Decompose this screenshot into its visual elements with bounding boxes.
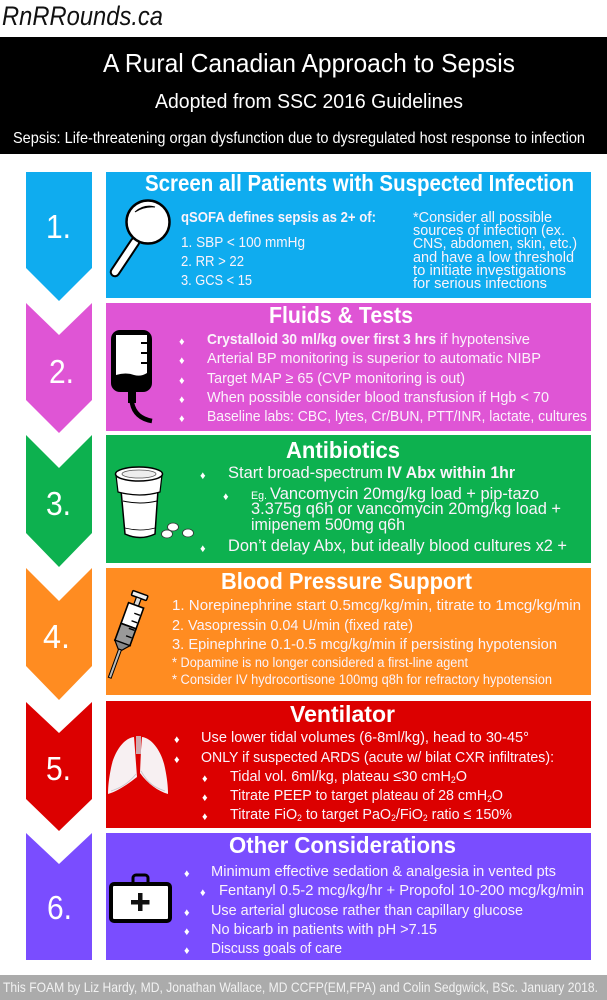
list: ventilator: /FiO [396, 806, 423, 823]
list: ventilator: Tidal vol. 6ml/kg, plateau ≤30 cmH [230, 768, 459, 785]
list: ventilator: ONLY if suspected ARDS (acute w/ bilat CXR infiltrates): [201, 749, 554, 766]
step arrow 6: 6. [47, 889, 72, 926]
list: other considerations [184, 863, 584, 957]
step arrow 3 [26, 435, 92, 567]
list: vasopressors: 1. Norepinephrine start 0.5mcg/kg/min, titrate to 1mcg/kg/min [172, 597, 581, 614]
note: sources of infection: *Consider all possible [413, 209, 552, 226]
list: antibiotics: Don’t delay Abx, but ideally blood cultures x2 + [228, 537, 567, 555]
list: vasopressors: * Consider IV hydrocortisone 100mg q8h for refractory hypotension [172, 672, 552, 687]
list: fluids and tests: Baseline labs: CBC, lytes, Cr/BUN, PTT/INR, lactate, cultures [207, 408, 587, 425]
list: fluids and tests: if hypotensive [440, 331, 530, 348]
list: antibiotics: 3.375g q6h or vancomycin 20mg/kg load + [251, 500, 561, 518]
note: sources of infection [413, 209, 577, 292]
list: other considerations: Minimum effective sedation & analgesia in vented pts [211, 863, 556, 880]
list: vasopressors: 3. Epinephrine 0.1-0.5 mcg/kg/min if persisting hypotension [172, 636, 557, 653]
step arrow 6 [26, 833, 92, 960]
list: other considerations: ♦ [184, 868, 190, 880]
list: vasopressors: * Dopamine is no longer considered a first-line agent [172, 655, 468, 670]
list: ventilator: Titrate FiO [230, 806, 300, 823]
list: ventilator: O [492, 787, 503, 804]
list: ventilator: O [456, 768, 467, 785]
list: antibiotics: Vancomycin 20mg/kg load + pip-tazo [270, 485, 539, 503]
list: fluids and tests: Crystalloid 30 ml/kg over first 3 hrs [207, 331, 436, 348]
icon: magnifying glass [115, 200, 170, 272]
qSOFA criteria: 1. SBP < 100 mmHg [181, 234, 305, 251]
list: fluids and tests: ♦ [179, 336, 185, 348]
list: other considerations: No bicarb in patients with pH >7.15 [211, 921, 437, 938]
icon: pill bottle [116, 467, 194, 538]
step arrow 1: 1. [46, 208, 71, 245]
list: other considerations: Use arterial glucose rather than capillary glucose [211, 902, 523, 919]
list: antibiotics: ♦ [223, 491, 229, 503]
step arrow 2: 2. [49, 353, 74, 390]
heading: fluids: Fluids & Tests [269, 302, 413, 328]
list: antibiotics: imipenem 500mg q6h [251, 516, 405, 534]
list: other considerations: ♦ [200, 887, 206, 899]
note: sources of infection: to initiate investigations [413, 262, 566, 279]
list: fluids and tests [179, 331, 587, 425]
icon: first aid kit [111, 875, 170, 921]
note: sources of infection: CNS, abdomen, skin, etc.) [413, 235, 577, 252]
step arrow 5 [26, 702, 92, 831]
heading: antibiotics: Antibiotics [286, 437, 400, 463]
list: ventilator: ♦ [202, 811, 208, 823]
list: ventilator: ratio ≤ 150% [428, 806, 512, 823]
list: antibiotics [200, 464, 567, 555]
list: antibiotics: Start broad-spectrum [228, 464, 383, 482]
icon: IV bag [111, 330, 152, 421]
list: antibiotics: Eg. [251, 490, 267, 502]
panel: other considerations [106, 832, 591, 960]
list: ventilator: 2 [391, 813, 396, 823]
list: fluids and tests: When possible consider blood transfusion if Hgb < 70 [207, 389, 549, 406]
list: ventilator: to target PaO [302, 806, 391, 823]
list: ventilator: 2 [423, 813, 428, 823]
list: ventilator: Use lower tidal volumes (6-8ml/kg), head to 30-45° [201, 729, 529, 746]
list: ventilator [174, 729, 554, 823]
step arrow 1 [26, 172, 92, 301]
title: A Rural Canadian Approach to Sepsis [103, 48, 515, 78]
logo: RnRRounds.ca: RnRRounds.ca [2, 1, 163, 31]
list: ventilator: ♦ [174, 734, 180, 746]
list: ventilator: ♦ [202, 792, 208, 804]
step arrow 5: 5. [46, 750, 71, 787]
heading: ventilator: Ventilator [290, 701, 395, 727]
list: other considerations: ♦ [184, 945, 190, 957]
list: other considerations: ♦ [184, 926, 190, 938]
note: sources of infection: sources of infection (ex. [413, 222, 565, 239]
list: ventilator: 2 [487, 794, 492, 804]
list: antibiotics: ♦ [200, 543, 206, 555]
list: vasopressors: 2. Vasopressin 0.04 U/min (fixed rate) [172, 617, 413, 634]
list: fluids and tests: Arterial BP monitoring is superior to automatic NIBP [207, 350, 541, 367]
qSOFA criteria: qSOFA defines sepsis as 2+ of: [181, 209, 376, 226]
list: fluids and tests: ♦ [179, 394, 185, 406]
panel: blood pressure support [102, 568, 591, 695]
list: fluids and tests: ♦ [179, 413, 185, 425]
icon: syringe [102, 590, 148, 680]
panel: screen all patients [106, 170, 591, 298]
list: ventilator: 2 [451, 775, 456, 785]
panel: antibiotics [106, 435, 591, 563]
list: fluids and tests: ♦ [179, 355, 185, 367]
list: vasopressors [172, 597, 581, 687]
list: fluids and tests: ♦ [179, 375, 185, 387]
qSOFA criteria: 2. RR > 22 [181, 253, 244, 270]
step arrow 4 [26, 568, 92, 700]
list: other considerations: ♦ [184, 907, 190, 919]
footer credits [0, 975, 607, 1000]
list: other considerations: Discuss goals of care [211, 940, 342, 957]
list: ventilator: ♦ [174, 754, 180, 766]
step arrow 3: 3. [46, 485, 71, 522]
list: other considerations: Fentanyl 0.5-2 mcg/kg/hr + Propofol 10-200 mcg/kg/min [219, 882, 584, 899]
heading: blood pressure: Blood Pressure Support [221, 568, 472, 594]
list: ventilator: 2 [297, 813, 302, 823]
subtitle: Adopted from SSC 2016 Guidelines [155, 91, 463, 113]
qSOFA criteria: 3. GCS < 15 [181, 272, 252, 289]
heading: other considerations: Other Considerations [229, 832, 456, 858]
list: antibiotics: ♦ [200, 470, 206, 482]
panel: ventilator [106, 701, 591, 828]
list: antibiotics: IV Abx within 1hr [387, 464, 516, 482]
list: ventilator: Titrate PEEP to target plateau of 28 cmH [230, 787, 501, 804]
step arrow 4: 4. [43, 618, 70, 655]
note: sources of infection: for serious infections [413, 275, 547, 292]
panel: fluids and tests [106, 302, 591, 431]
header banner [0, 37, 607, 154]
note: sources of infection: and have a low threshold [413, 249, 574, 266]
list: fluids and tests: Target MAP ≥ 65 (CVP monitoring is out) [207, 370, 465, 387]
list: ventilator: ♦ [202, 773, 208, 785]
icon: lungs [108, 736, 168, 794]
step arrow 2 [26, 303, 92, 433]
qSOFA criteria [181, 209, 376, 289]
